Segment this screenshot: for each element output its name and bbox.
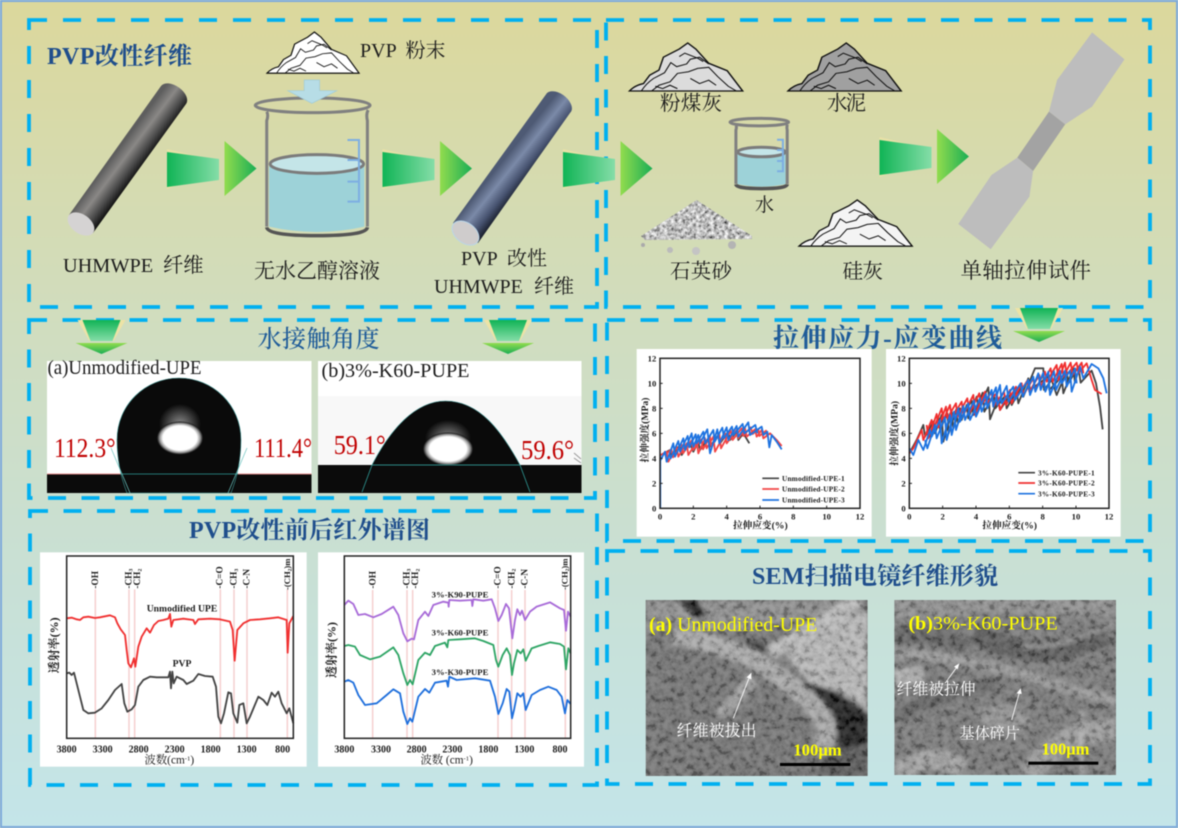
peak labels: -CH	[133, 572, 143, 589]
label: silica fume: 硅灰	[842, 260, 883, 283]
label: PVP modified UHMWPE fibre	[434, 247, 574, 298]
arrow: fibre to solution	[167, 141, 256, 196]
curve: Unmodified-UPE-3	[661, 422, 782, 462]
series labels	[432, 589, 489, 677]
legend: 3%-K60-PUPE-3	[1038, 489, 1095, 498]
label: matrix debris: 基体碎片	[959, 725, 1020, 743]
label: PVP modified UHMWPE fibre: 改性	[507, 247, 547, 270]
label: PVP modified UHMWPE fibre: PVP	[461, 248, 497, 270]
axis tick labels: 3800	[334, 745, 354, 756]
label: (a) Unmodified-UPE: (a) Unmodified-UPE	[649, 614, 817, 636]
curve: 3%-K90-PUPE	[344, 599, 571, 641]
axis tick labels: 2300	[165, 745, 185, 756]
panel: tensile stress-strain curves	[607, 308, 1150, 541]
image: modified droplet	[318, 361, 582, 493]
y axis label: 透射率(%)	[46, 617, 61, 673]
tick labels: 0	[652, 503, 656, 513]
panel: uniaxial tensile specimen preparation	[563, 20, 1150, 307]
peak labels: -CH	[507, 572, 517, 589]
value: left angle 59.1: 59.1°	[334, 430, 386, 460]
series labels: 3%-K90-PUPE	[432, 589, 489, 599]
heading: tensile stress-strain curves: 拉伸应力-应变曲线	[773, 324, 1002, 353]
y axis label: 拉伸强度(MPa)	[639, 398, 651, 462]
curve: 3%-K30-PUPE	[344, 677, 571, 724]
label: fly ash: 粉煤灰	[660, 92, 722, 115]
tick labels: 4	[652, 453, 657, 463]
peak labels: 3	[407, 569, 413, 572]
axis tick labels: 3800	[57, 745, 77, 756]
label: water: 水	[755, 194, 774, 216]
heading: infrared spectra before and after PVP modification: PVP改性前后红外谱图	[189, 517, 430, 544]
label: (b) 3%-K60-PUPE: (b)3%-K60-PUPE	[322, 360, 470, 382]
chart: IR spectra of modified fibres	[318, 552, 584, 767]
image: SEM of unmodified UPE	[646, 600, 868, 776]
arrow: fibre into mix	[563, 141, 652, 196]
scale bar	[1028, 762, 1098, 765]
label: cement: 水泥	[827, 92, 866, 115]
label: (a) Unmodified-UPE: (a)Unmodified-UPE	[48, 357, 202, 379]
panel: PVP modified fibre	[29, 20, 597, 307]
icon: PVP powder pile	[267, 32, 359, 73]
arrow: to matrix debris	[1012, 688, 1022, 720]
axis tick labels: 1800	[201, 745, 221, 756]
heading: SEM fibre morphology: SEM扫描电镜纤维形貌	[752, 563, 998, 590]
peak labels: 2	[137, 569, 143, 572]
label: UHMWPE fibre: 纤维	[163, 254, 204, 277]
label: (b) 3%-K60-PUPE: (b)3%-K60-PUPE	[908, 613, 1058, 634]
peak labels: 3	[129, 569, 135, 572]
label: PVP powder: 粉末	[406, 39, 446, 62]
axis tick labels: 2800	[407, 745, 427, 756]
icon: dog-bone tensile specimen	[958, 32, 1125, 249]
tick labels: 6	[901, 428, 906, 438]
curve: 3%-K60-PUPE-3	[909, 364, 1107, 455]
axis tick labels: 2300	[442, 745, 462, 756]
legend: 3%-K60-PUPE-2	[1038, 479, 1095, 488]
image: SEM of 3%-K60-PUPE	[894, 600, 1116, 775]
value: right angle 111.4: 111.4°	[254, 433, 312, 463]
peak labels: )m	[282, 558, 292, 569]
heading: water contact angle: 水接触角度	[258, 326, 380, 353]
peak labels: 2	[512, 569, 518, 572]
curve: PVP	[67, 672, 293, 723]
x axis label: -1	[464, 755, 469, 762]
peak labels: -(CH	[560, 571, 570, 590]
tick labels: 12	[856, 511, 864, 521]
scale label: 100 micrometres: 100μm	[1042, 739, 1089, 758]
axis tick labels: 1800	[478, 745, 498, 756]
arrow: to stretched fibre	[945, 663, 959, 683]
tick labels: 4	[974, 511, 979, 521]
series label: PVP: PVP	[173, 658, 191, 669]
tick labels: 10	[897, 378, 906, 388]
label: quartz sand: 石英砂	[670, 260, 732, 283]
tick labels: 2	[901, 478, 906, 488]
axis ticks	[660, 383, 827, 508]
x axis label: )	[190, 755, 194, 767]
curve: Unmodified-UPE-2	[661, 427, 782, 462]
legend: Unmodified-UPE-1	[782, 474, 845, 483]
tick labels: 12	[648, 353, 656, 363]
icon: beaker with ethanol	[255, 80, 370, 236]
tick labels: 12	[1105, 511, 1113, 521]
icon: UHMWPE fibre	[63, 83, 187, 240]
tick labels: 10	[1072, 511, 1080, 521]
panel: infrared spectra	[30, 511, 597, 785]
icon: small water beaker	[730, 118, 789, 189]
label: fibre pulled out: 纤维被拔出	[677, 722, 757, 740]
peak labels: 2	[415, 569, 421, 572]
tick labels: 2	[691, 511, 695, 521]
chart: IR spectra of UPE and PVP	[40, 552, 307, 767]
tick labels: 8	[1040, 511, 1045, 521]
icon: PVP modified fibre	[448, 91, 572, 250]
tick labels: 12	[897, 353, 906, 363]
x axis label: 波数 (cm	[420, 755, 464, 767]
axis tick labels: 3300	[93, 745, 113, 756]
axis tick labels: 1300	[237, 745, 257, 756]
peak labels: 3	[234, 569, 240, 572]
tick labels: 2	[940, 511, 945, 521]
scale bar	[780, 763, 850, 766]
tick labels	[648, 353, 864, 521]
axis tick labels: 2800	[129, 745, 149, 756]
arrow: to pulled-out fibre	[733, 673, 751, 718]
tick labels: 6	[652, 428, 657, 438]
legend: Unmodified-UPE-2	[782, 485, 845, 494]
peak labels: -(CH	[282, 571, 292, 590]
label: PVP modified UHMWPE fibre: 纤维	[534, 275, 574, 298]
arrow: down right	[482, 320, 534, 354]
legend	[1018, 468, 1095, 498]
peak labels: )m	[560, 558, 570, 569]
peak labels: -OH	[368, 570, 378, 589]
peak labels: -C-N	[242, 569, 252, 589]
value: right angle 59.6: 59.6°	[521, 435, 574, 465]
peak labels: -CH	[230, 572, 240, 589]
curve: 3%-K60-PUPE	[344, 638, 571, 685]
curve: Unmodified UPE	[67, 614, 293, 667]
arrow: solution to modified fibre	[382, 141, 472, 196]
peak labels: -CH	[411, 572, 421, 589]
axis tick labels	[334, 745, 567, 756]
tick labels: 6	[1007, 511, 1012, 521]
icon: cement pile	[788, 43, 901, 91]
peak labels: -CH	[124, 572, 134, 589]
x axis label: 拉伸应变(%)	[733, 520, 788, 532]
x axis label: )	[469, 755, 473, 767]
peak labels: -C=O	[216, 566, 226, 589]
heading: PVP modified fibre: PVP改性纤维	[47, 43, 192, 70]
label: uniaxial tensile specimen: 单轴拉伸试件	[960, 259, 1091, 283]
icon: fly ash pile	[630, 43, 743, 91]
axis tick labels: 800	[553, 745, 567, 756]
peak labels: 2	[287, 568, 293, 571]
tick labels: 6	[758, 511, 763, 521]
label: anhydrous ethanol: 无水乙醇溶液	[254, 259, 380, 283]
tick labels: 8	[901, 403, 906, 413]
tick labels: 10	[822, 511, 831, 521]
axis tick labels: 800	[275, 745, 290, 756]
tick labels: 4	[725, 511, 730, 521]
peak labels: -C=O	[493, 566, 503, 589]
value: left angle 112.3: 112.3°	[54, 433, 116, 463]
tick labels: 4	[901, 453, 906, 463]
arrow: down to stress-strain	[1013, 308, 1065, 342]
chart: 3%-K60-PUPE stress-strain	[886, 349, 1121, 537]
y axis label: 透射率(%)	[323, 622, 338, 678]
label: UHMWPE fibre: UHMWPE	[63, 255, 153, 277]
curve: 3%-K60-PUPE-2	[909, 363, 1102, 453]
x axis label: 拉伸应变(%)	[982, 520, 1037, 532]
peak labels: 2	[565, 568, 571, 571]
x axis label: -1	[185, 755, 190, 762]
label: PVP modified UHMWPE fibre: UHMWPE	[434, 276, 523, 298]
scale label: 100 micrometres: 100μm	[793, 741, 842, 760]
arrow: mix to specimen	[880, 129, 969, 184]
panel: water contact angle	[29, 320, 595, 498]
tick labels: 8	[652, 403, 657, 413]
peak labels: -OH	[91, 570, 101, 589]
tick labels: 0	[901, 503, 906, 513]
legend: Unmodified-UPE-3	[782, 496, 845, 505]
series labels: 3%-K30-PUPE	[432, 667, 489, 677]
peak labels	[91, 558, 293, 590]
y axis label: 拉伸强度(MPa)	[888, 401, 900, 466]
curve: 3%-K60-PUPE-1	[909, 367, 1103, 453]
peak labels: -C-N	[520, 569, 530, 589]
image: unmodified droplet	[47, 361, 312, 493]
arrow: down left	[76, 320, 128, 354]
axis tick labels: 1300	[514, 745, 534, 756]
peak labels	[368, 558, 571, 590]
label: fibre stretched: 纤维被拉伸	[897, 681, 976, 699]
tick labels: 2	[652, 478, 656, 488]
curve: Unmodified-UPE-1	[661, 432, 749, 457]
legend	[762, 474, 845, 505]
axis tick labels	[57, 745, 290, 756]
tick labels: 8	[791, 511, 796, 521]
tick labels: 0	[907, 511, 911, 521]
axis tick labels: 3300	[371, 745, 391, 756]
peak labels: -CH	[402, 572, 412, 589]
icon: quartz sand pile	[641, 200, 752, 255]
x axis label: 波数(cm	[145, 755, 185, 767]
series label: Unmodified UPE: Unmodified UPE	[147, 603, 217, 614]
label: PVP powder: PVP	[360, 40, 396, 62]
legend: 3%-K60-PUPE-1	[1038, 468, 1095, 477]
icon: silica fume pile	[799, 200, 912, 246]
panel: SEM fibre morphology	[607, 551, 1150, 784]
chart: Unmodified UPE stress-strain	[637, 349, 872, 537]
tick labels: 10	[648, 378, 656, 388]
axis ticks	[909, 383, 1076, 508]
tick labels: 0	[658, 511, 662, 521]
tick labels	[897, 353, 1113, 521]
series labels: 3%-K60-PUPE	[432, 628, 489, 638]
